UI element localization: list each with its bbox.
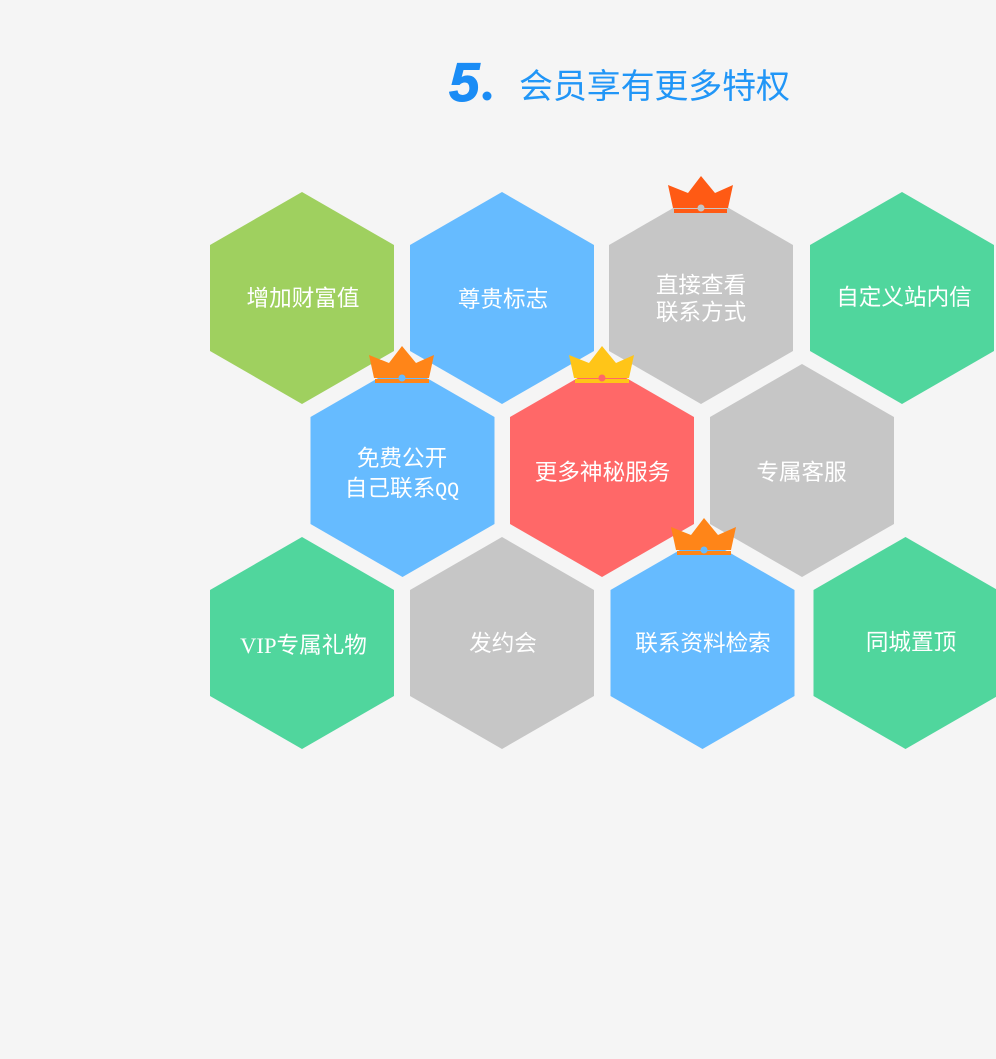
- hexagon: 直接查看联系方式: [609, 192, 793, 404]
- title: 5: [449, 51, 481, 113]
- icon: crown yellow: [569, 346, 634, 383]
- hexagon: 增加财富值: [210, 192, 394, 404]
- hexagon: 联系资料检索: 联系资料检索: [635, 631, 771, 656]
- hexagon: 发约会: 发约会: [469, 631, 537, 656]
- hexagon: 更多神秘服务: 更多神秘服务: [535, 460, 670, 485]
- hexagon: 增加财富值: 增加财富值: [247, 286, 359, 311]
- hexagon: 免费公开自己联系QQ: 免费公开: [357, 446, 447, 471]
- hexagon: 免费公开自己联系QQ: 自己联系QQ: [345, 476, 459, 503]
- hexagon: VIP专属礼物: [210, 537, 394, 749]
- icon: crown orange left: [369, 346, 434, 383]
- hexagon: 直接查看联系方式: 联系方式: [656, 300, 746, 325]
- hexagon: 同城置顶: 同城置顶: [866, 630, 956, 655]
- icon: crown red: [668, 176, 733, 213]
- title: 会员享有更多特权: [519, 68, 790, 106]
- hexagon: 免费公开自己联系QQ: [310, 364, 494, 577]
- hexagon: 专属客服: 专属客服: [756, 460, 847, 485]
- hexagon: 发约会: [410, 537, 594, 749]
- hexagon: 同城置顶: [814, 537, 996, 749]
- hexagon: 自定义站内信: [810, 192, 994, 404]
- hexagon: 联系资料检索: [610, 537, 794, 749]
- hexagon: VIP专属礼物: VIP专属礼物: [240, 633, 367, 658]
- hexagon: 直接查看联系方式: 直接查看: [656, 273, 746, 298]
- hexagon: 尊贵标志: 尊贵标志: [458, 287, 548, 312]
- hexagon: 更多神秘服务: [510, 364, 694, 577]
- hexagon: 专属客服: [710, 364, 894, 577]
- icon: crown orange right: [671, 518, 736, 555]
- title: [449, 51, 790, 113]
- hexagon: 尊贵标志: [410, 192, 594, 404]
- hexagon: 自定义站内信: 自定义站内信: [836, 285, 972, 310]
